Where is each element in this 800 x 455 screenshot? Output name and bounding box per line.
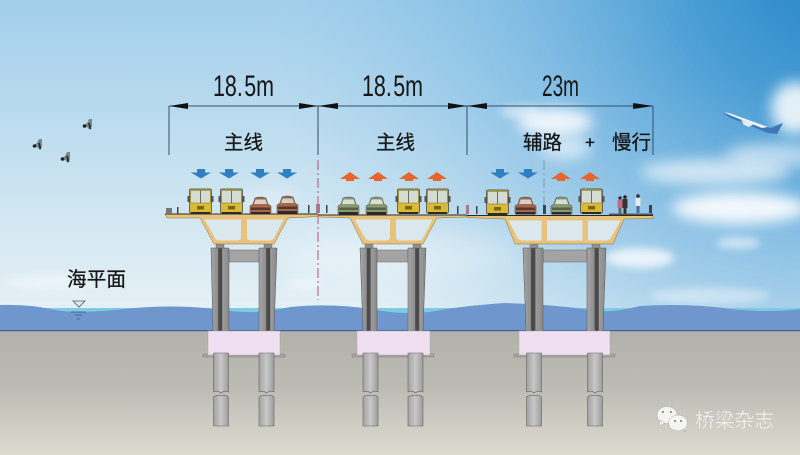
pier 1 — [203, 248, 285, 426]
label: main line 2: 主线 — [376, 132, 415, 154]
label: plus: + — [585, 133, 595, 152]
pedestrians — [618, 194, 640, 214]
dimension: 23m — [467, 70, 653, 155]
clouds — [5, 82, 800, 304]
side road dashed line — [543, 160, 545, 206]
dimension: 18.5m middle: 18.5m — [362, 70, 423, 103]
label: slow traffic: 慢行 — [612, 132, 651, 154]
direction arrows: orange — [340, 172, 600, 181]
label: side road: 辅路 — [523, 132, 562, 154]
direction arrows: blue — [191, 169, 538, 178]
vehicles: main line 2 — [338, 189, 450, 214]
dimension: 18.5m left: 18.5m — [213, 70, 274, 103]
label: main line 1: 主线 — [224, 132, 263, 154]
dimension: 23m: 23m — [542, 70, 579, 103]
dimension: 18.5m middle — [318, 70, 467, 155]
pier 3 — [514, 248, 615, 426]
railings and median barriers — [166, 204, 652, 214]
vehicles: side road — [484, 189, 604, 215]
sidewalk — [609, 214, 653, 215]
watermark text: 桥梁杂志 — [695, 410, 774, 432]
ground — [0, 331, 800, 455]
center dashed line — [317, 160, 319, 300]
icon: WeChat logo — [657, 406, 688, 432]
sea — [0, 303, 800, 331]
pier 2 — [352, 248, 434, 426]
sea bed line — [0, 330, 800, 331]
box girder 1 — [165, 214, 318, 244]
bearings — [216, 244, 600, 248]
box girder 2 — [318, 214, 467, 244]
dimension: 18.5m left — [169, 70, 318, 155]
airplane — [723, 112, 783, 134]
sea level label: 海平面 — [67, 268, 126, 291]
box girder 3 — [467, 215, 653, 244]
sky background — [0, 0, 800, 310]
water level symbol — [71, 301, 86, 319]
vehicles: main line 1 — [188, 189, 298, 214]
birds — [33, 119, 92, 163]
